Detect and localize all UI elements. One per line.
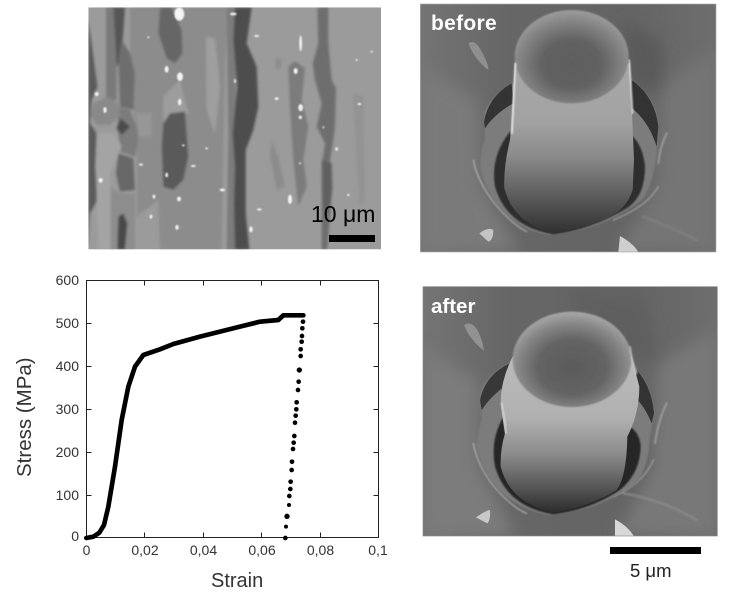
debris — [468, 42, 488, 70]
pillar top — [513, 312, 631, 407]
x-axis title: Strain — [211, 570, 263, 592]
x-axis tick labels: 0,08 — [307, 542, 334, 558]
y-axis tick labels: 100 — [56, 487, 79, 503]
chart: stress-strain curve — [13, 272, 388, 592]
pillar body — [504, 63, 634, 233]
panel: microstructure micrograph — [88, 7, 381, 249]
unloading curve — [283, 319, 305, 540]
y-axis tick labels: 600 — [56, 272, 79, 288]
x-axis tick labels: 0 — [83, 542, 91, 558]
y-axis tick labels: 200 — [56, 444, 79, 460]
x-axis tick labels: 0,1 — [368, 542, 388, 558]
loading curve — [86, 315, 305, 540]
surface ridges — [473, 403, 697, 520]
y-axis tick labels: 500 — [56, 315, 79, 331]
x-axis tick labels: 0,04 — [190, 542, 217, 558]
pillar edge highlights — [502, 347, 637, 433]
y-axis tick labels: 300 — [56, 401, 79, 417]
scale bar: 10 μm — [329, 235, 375, 242]
y-axis tick labels: 400 — [56, 358, 79, 374]
dark ring around pillar base — [494, 417, 641, 514]
x-axis tick labels: 0,06 — [248, 542, 276, 558]
plot frame and ticks — [86, 280, 378, 538]
x-axis tick labels: 0,02 — [131, 542, 159, 558]
dark ring around pillar base — [494, 132, 645, 234]
scale label: 10 μm: 10 μm — [311, 201, 375, 227]
label: after: after — [431, 295, 475, 318]
surface shading — [432, 33, 704, 252]
pillar edge highlights — [512, 60, 633, 133]
y-axis title: Stress (MPa) — [13, 357, 36, 477]
surface shading — [430, 342, 712, 536]
scale label: 5 μm: 5 μm — [630, 560, 672, 581]
label: before: before — [431, 12, 497, 35]
y-axis tick labels — [56, 272, 79, 544]
panel: pillar before compression — [420, 4, 716, 252]
surface ridges — [472, 132, 668, 233]
crater — [481, 80, 658, 235]
pillar top — [515, 10, 629, 103]
debris — [464, 323, 484, 351]
pillar body — [501, 357, 639, 513]
panel: pillar after compression — [423, 287, 717, 536]
scale bar: 5 μm — [610, 547, 701, 554]
x-axis tick labels — [83, 542, 388, 558]
crater — [477, 363, 654, 515]
y-axis tick labels: 0 — [71, 528, 79, 544]
